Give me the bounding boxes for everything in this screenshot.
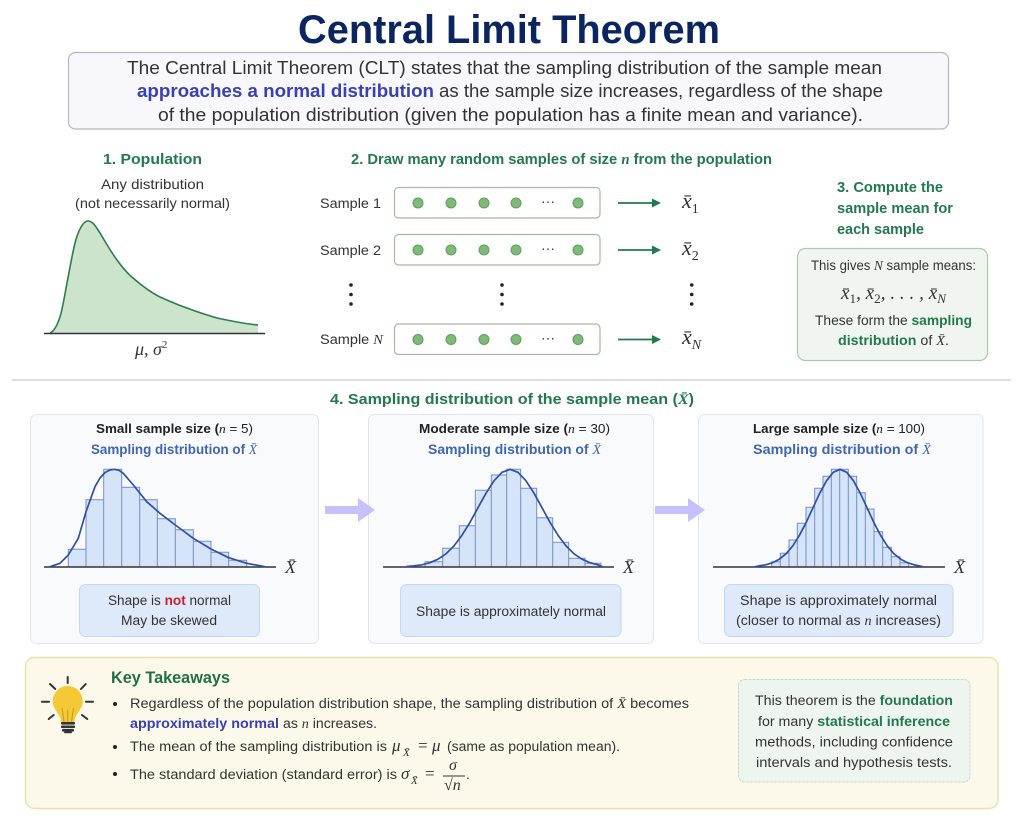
panel: large sample size: Large sample size ( n = 100) — [753, 422, 925, 436]
definition panel: of the population distribution (given the population has a finite mean and variance). — [158, 104, 863, 125]
bullet: standard error: σ — [449, 757, 458, 774]
bullet: standard error — [113, 757, 470, 794]
callout: closer to normal: (closer to normal as n increases) — [736, 613, 941, 628]
panel: sample means: x̄ — [841, 283, 849, 304]
vertical ellipsis row — [349, 283, 694, 306]
bullet: mean of sampling distribution: μ — [391, 736, 401, 755]
definition panel: approaches a normal distribution — [137, 80, 434, 101]
bullet: standard error: X̄ — [410, 775, 419, 787]
panel: population: 2 — [162, 339, 167, 351]
arrow: moderate to large — [655, 498, 705, 522]
bullet: mean of sampling distribution: The mean of the sampling distribution is — [130, 739, 387, 754]
bullet: standard error: = — [425, 764, 435, 783]
bullet: mean of sampling distribution: μ — [431, 736, 441, 755]
callout: foundation: This theorem is the foundation — [755, 693, 953, 708]
definition panel: The Central Limit Theorem (CLT) states that the sampling distribution of the sample mean — [127, 57, 882, 78]
sample row N: x̄ — [682, 324, 692, 349]
bullet: mean of sampling distribution: = — [418, 736, 428, 755]
panel: population: Any distribution — [101, 176, 204, 192]
panel: small sample size: Sampling distribution of X̄ — [91, 441, 257, 458]
histogram: n = 100 — [713, 469, 966, 577]
bullet: mean of sampling distribution — [113, 736, 620, 759]
panel: large sample size: Sampling distribution of X̄ — [753, 441, 931, 458]
panel: moderate sample size — [368, 414, 654, 644]
title: Central Limit Theorem — [298, 8, 720, 52]
heading: compute sample mean: 3. Compute the — [837, 179, 943, 196]
sample row 1: x̄ — [682, 188, 692, 213]
sample row N: Sample N — [320, 332, 384, 347]
panel: large sample size — [698, 414, 983, 644]
sample row 2: x̄ — [682, 235, 692, 260]
bullet: standard error: √n — [444, 777, 461, 794]
bullet: approximately normal — [113, 696, 689, 731]
panel: population — [44, 151, 265, 359]
panel: sample means: These form the sampling — [815, 313, 972, 328]
heading: compute sample mean — [837, 179, 953, 238]
panel: sample means: This gives N sample means: — [811, 258, 976, 273]
panel: population: (not necessarily normal) — [75, 195, 230, 211]
callout: foundation — [738, 680, 970, 782]
bullet: approximately normal: as n increases. — [283, 716, 377, 731]
heading: draw samples: 2. Draw many random samples of size n from the population — [351, 151, 772, 168]
panel: moderate sample size: Moderate sample size ( n = 30) — [419, 422, 610, 436]
histogram: n = 5: X̄ — [284, 557, 297, 577]
sample row 1: Sample 1 — [320, 196, 381, 211]
heading: compute sample mean: each sample — [837, 221, 924, 238]
sample row 1: ··· — [541, 193, 555, 209]
sample row N: ··· — [541, 330, 555, 346]
panel: sample means: distribution of X̄. — [838, 333, 949, 348]
histogram: n = 30 — [383, 469, 635, 577]
panel: sample means: , x̄ — [856, 283, 875, 304]
panel: sample means: , . . . , x̄ — [881, 283, 938, 304]
skewed population curve — [50, 221, 258, 333]
panel: key takeaways — [26, 658, 998, 808]
bullet: mean of sampling distribution: (same as population mean). — [447, 739, 620, 754]
sample row N — [320, 324, 702, 354]
callout: not normal — [80, 584, 260, 636]
panel: sample means: N — [936, 291, 947, 306]
bullet: standard error: The standard deviation (standard error) is — [130, 767, 397, 782]
bullet: approximately normal: Regardless of the population distribution shape, the sampling distribution of X̄ becomes — [130, 696, 689, 711]
sample row 1: 1 — [692, 202, 699, 217]
callout: not normal: Shape is not normal — [108, 593, 231, 608]
icon: light bulb — [42, 677, 93, 733]
arrow: small to moderate — [325, 498, 375, 522]
heading: sampling distribution: 4. Sampling distribution of the sample mean ( X̄) — [330, 391, 694, 408]
callout: foundation: methods, including confidence — [755, 734, 953, 750]
heading: key takeaways: Key Takeaways — [111, 669, 230, 687]
panel: sample means — [798, 248, 988, 360]
callout: foundation: intervals and hypothesis tests. — [756, 755, 952, 770]
panel: small sample size — [30, 414, 318, 644]
bullet: standard error: . — [466, 767, 470, 782]
sample row 2: 2 — [692, 249, 699, 264]
heading: compute sample mean: sample mean for — [837, 200, 953, 217]
histogram: n = 30: X̄ — [622, 557, 635, 577]
heading: population: 1. Population — [103, 151, 202, 168]
callout: not normal: May be skewed — [121, 613, 217, 628]
panel: small sample size: Small sample size ( n = 5) — [96, 422, 253, 436]
sample row 2: ··· — [541, 240, 555, 256]
bullet: standard error: σ — [401, 764, 410, 783]
panel: population: μ, σ — [135, 339, 162, 359]
bullet: approximately normal: approximately normal — [130, 716, 279, 731]
callout: closer to normal — [724, 584, 953, 636]
definition panel: as the sample size increases, regardless of the shape — [439, 80, 883, 101]
histogram: n = 5 — [44, 469, 297, 577]
callout: foundation: for many statistical inference — [758, 714, 951, 729]
panel: sample means: 2 — [874, 291, 881, 306]
histogram: n = 100: X̄ — [953, 557, 966, 577]
sample row 2: Sample 2 — [320, 243, 381, 258]
callout: approximately normal — [400, 584, 621, 636]
panel: sample means: 1 — [850, 291, 856, 306]
callout: approximately normal: Shape is approximately normal — [416, 604, 606, 619]
definition panel — [68, 52, 948, 129]
callout: closer to normal: Shape is approximately normal — [740, 593, 937, 608]
sample row N: N — [691, 338, 702, 353]
panel: moderate sample size: Sampling distribution of X̄ — [428, 441, 601, 458]
sample row 2 — [320, 234, 699, 265]
bullet: mean of sampling distribution: X̄ — [402, 747, 411, 759]
sample row 1 — [320, 188, 699, 218]
